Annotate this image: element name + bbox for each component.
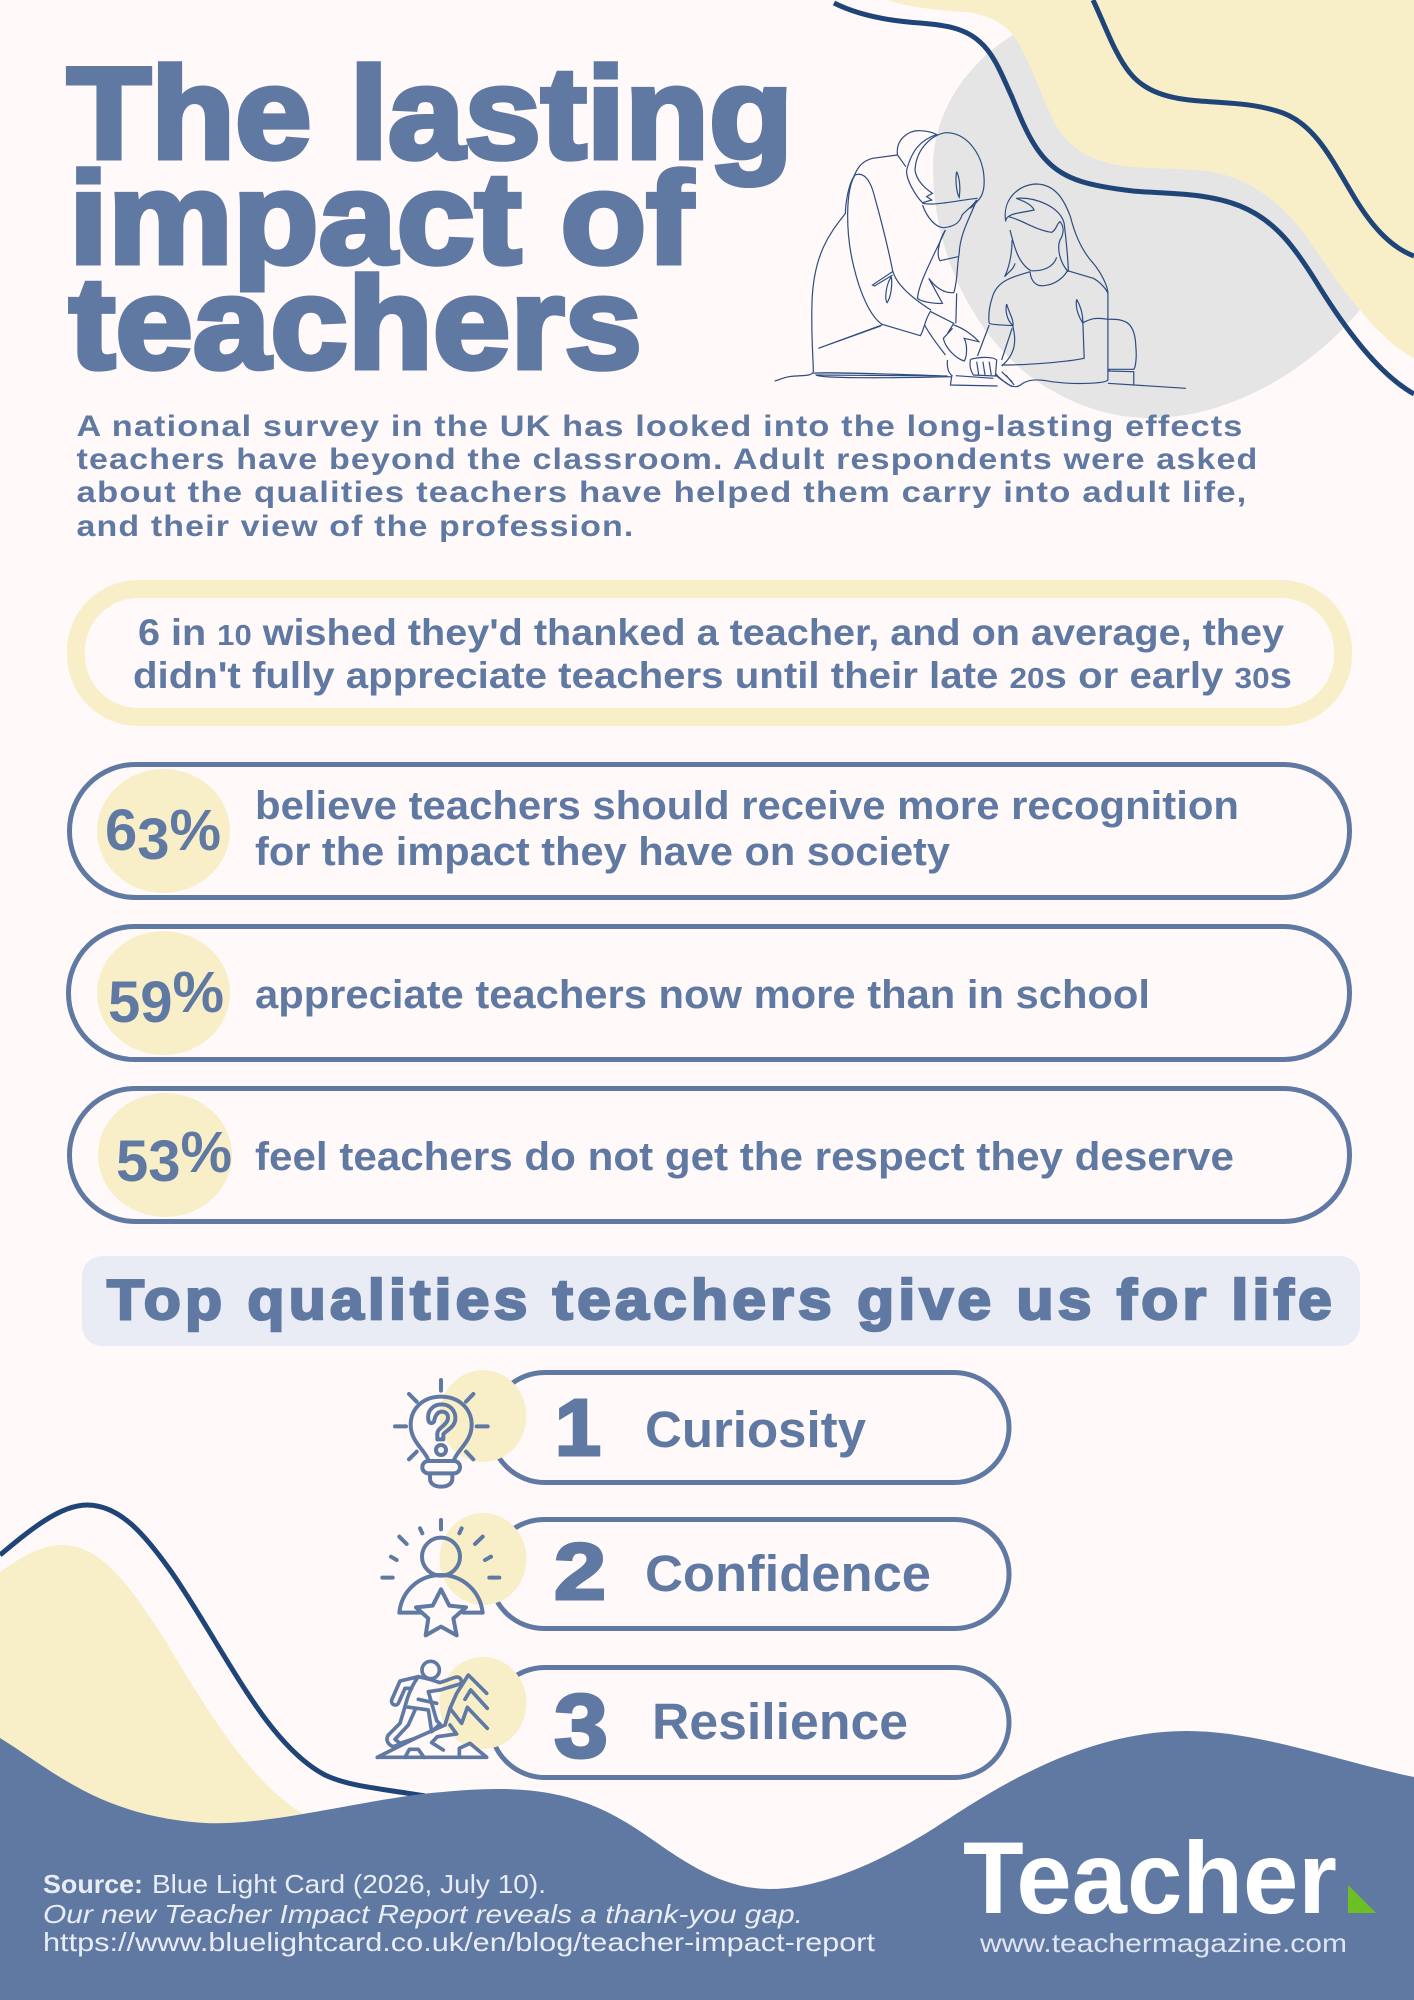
quality 2: confidence	[382, 1513, 1009, 1635]
stat pill: 53%: %	[181, 1120, 232, 1185]
stat pill: 53%: 53	[116, 1129, 181, 1194]
source citation: Our new Teacher Impact Report reveals a thank-you gap.	[43, 1899, 803, 1929]
logo: Teacher magazine: Teacher	[963, 1821, 1337, 1935]
logo: Teacher magazine: www.teachermagazine.com	[979, 1928, 1347, 1958]
title: The lasting	[67, 40, 793, 186]
source citation	[43, 1869, 876, 1957]
stat pill: 59%	[68, 926, 1350, 1060]
source citation: https://www.bluelightcard.co.uk/en/blog/teacher-impact-report	[43, 1927, 876, 1957]
quality 3: resilience	[377, 1657, 1009, 1778]
callout: thank a teacher	[76, 589, 1343, 717]
quality 1: curiosity: Curiosity	[645, 1401, 867, 1458]
source citation: Blue Light Card (2026, July 10).	[152, 1869, 546, 1899]
source citation: Source:	[43, 1869, 143, 1899]
quality 2: confidence: 2	[554, 1527, 606, 1616]
footer wave	[0, 1731, 1414, 2000]
callout: thank a teacher: 6 in 10 wished they'd thanked a teacher, and on average, they	[138, 612, 1284, 653]
icon: person with star	[382, 1520, 499, 1635]
intro paragraph: A national survey in the UK has looked into the long-lasting effects	[76, 410, 1244, 443]
illustration: teacher helping a student, line art	[775, 131, 1186, 388]
intro paragraph: teachers have beyond the classroom. Adult respondents were asked	[76, 443, 1258, 476]
icon: lightbulb with question mark	[395, 1380, 488, 1487]
quality 3: resilience: 3	[554, 1677, 608, 1777]
title	[67, 40, 793, 396]
quality 3: resilience: Resilience	[652, 1693, 908, 1750]
intro paragraph: and their view of the profession.	[76, 510, 634, 543]
stat pill: 53%	[70, 1088, 1350, 1222]
stat pill: 63%: 3	[137, 807, 170, 872]
title: impact of	[69, 145, 694, 291]
quality 1: curiosity	[395, 1370, 1009, 1487]
navy wave bottom-left and yellow shape	[0, 1505, 425, 1830]
stat pill: 59%: appreciate teachers now more than in school	[255, 973, 1150, 1017]
stat pill: 53%: feel teachers do not get the respect they deserve	[255, 1135, 1234, 1179]
intro paragraph: about the qualities teachers have helped them carry into adult life,	[76, 476, 1248, 509]
title: teachers	[69, 250, 642, 396]
stat pill: 63%	[70, 764, 1350, 898]
stat pill: 59%: 59	[108, 970, 173, 1035]
intro paragraph	[76, 410, 1258, 543]
callout: thank a teacher: didn't fully appreciate teachers until their late 20s or early 30s	[133, 655, 1292, 696]
section heading: top qualities	[82, 1256, 1360, 1346]
decorative top-right shapes	[834, 0, 1414, 418]
stat pill: 63%: 6	[105, 798, 137, 863]
section heading: top qualities: Top qualities teachers give us for life	[107, 1268, 1336, 1332]
icon: climber on mountain	[377, 1661, 487, 1757]
quality 1: curiosity: 1	[555, 1383, 601, 1472]
stat pill: 63%: %	[170, 798, 221, 863]
stat pill: 59%: %	[173, 960, 224, 1025]
quality 2: confidence: Confidence	[645, 1545, 931, 1602]
stat pill: 63%: for the impact they have on society	[255, 830, 951, 874]
stat pill: 63%: believe teachers should receive more recognition	[255, 784, 1239, 828]
